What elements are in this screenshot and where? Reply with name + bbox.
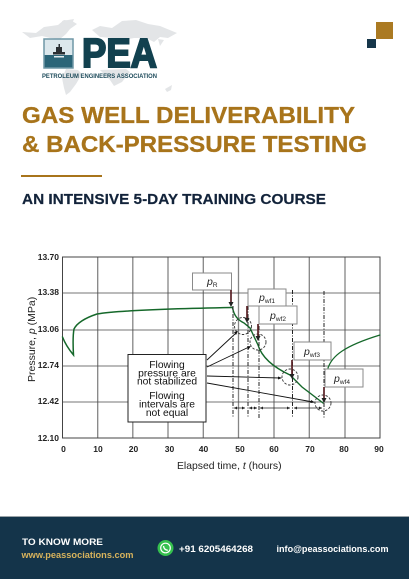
x axis labels: 20: [129, 444, 138, 454]
x axis labels: 10: [93, 444, 103, 454]
title: GAS WELL DELIVERABILITY: [22, 102, 355, 128]
association name: PETROLEUM ENGINEERS ASSOCIATION: [42, 74, 157, 80]
chart frame: [62, 257, 380, 438]
label pR: [192, 273, 232, 290]
label pwf2: p: [270, 310, 276, 322]
footer website: www.peassociations.com: [20, 550, 134, 560]
pressure vs time chart: [26, 252, 384, 472]
label pwf2: wf2: [275, 316, 286, 323]
label pwf4: p: [334, 373, 340, 385]
y axis labels: [38, 252, 59, 443]
y axis title: Pressure, p (MPa): [26, 297, 38, 382]
title: [22, 102, 367, 157]
label pwf4: wf4: [339, 379, 350, 386]
callout arrows: [207, 331, 315, 403]
x axis labels: 30: [165, 444, 174, 454]
icon: whatsapp: [158, 540, 174, 556]
x axis title: Elapsed time, t (hours): [177, 461, 282, 472]
world map backdrop: [22, 19, 177, 95]
vertical dash-dot markers: [233, 290, 324, 419]
x axis labels: [61, 444, 384, 454]
y axis labels: 13.70: [38, 252, 59, 262]
label pwf4: [325, 369, 363, 387]
y axis labels: 13.06: [38, 324, 59, 334]
title divider: [21, 175, 102, 177]
dashed circles: [234, 318, 331, 411]
callout box: Flowing: [149, 360, 185, 371]
subtitle: AN INTENSIVE 5-DAY TRAINING COURSE: [22, 192, 326, 208]
footer phone: +91 6205464268: [179, 544, 253, 555]
logo: [22, 19, 177, 95]
label pwf3: wf3: [309, 352, 320, 359]
title: & BACK-PRESSURE TESTING: [22, 131, 367, 157]
x axis labels: 60: [269, 444, 279, 454]
x axis labels: 70: [305, 444, 315, 454]
interval arrows: [234, 406, 322, 410]
y axis labels: 12.74: [38, 360, 59, 370]
x axis labels: 90: [374, 444, 384, 454]
callout box: Flowing: [149, 391, 185, 402]
label pwf1: p: [259, 292, 265, 304]
pressure point arrows: [228, 290, 326, 403]
y axis labels: 12.42: [38, 396, 59, 406]
PEA wordmark: PEA: [82, 30, 157, 76]
label pwf3: p: [304, 346, 310, 358]
logo image square: [44, 39, 73, 68]
y axis labels: 12.10: [38, 433, 59, 443]
x axis labels: 50: [235, 444, 245, 454]
corner squares decoration: [367, 22, 393, 48]
label pwf1: [248, 289, 286, 306]
callout box: intervals are: [139, 400, 195, 410]
callout box: [128, 354, 206, 422]
pressure curve: [62, 308, 380, 403]
x axis labels: 40: [199, 444, 208, 454]
label pR: R: [213, 282, 218, 289]
label pwf2: [259, 306, 297, 324]
callout box: pressure are: [138, 368, 196, 380]
footer email: info@peassociations.com: [276, 544, 388, 555]
callout box: not equal: [146, 408, 188, 419]
footer call to action: TO KNOW MORE: [22, 537, 103, 548]
label pwf1: wf1: [264, 298, 275, 305]
x axis labels: 80: [339, 444, 349, 454]
label pwf3: [294, 342, 331, 360]
label pR: p: [207, 276, 213, 288]
footer: [0, 516, 409, 579]
x axis labels: 0: [61, 444, 66, 454]
callout box: not stabilized: [137, 376, 197, 388]
y axis labels: 13.38: [38, 287, 59, 297]
